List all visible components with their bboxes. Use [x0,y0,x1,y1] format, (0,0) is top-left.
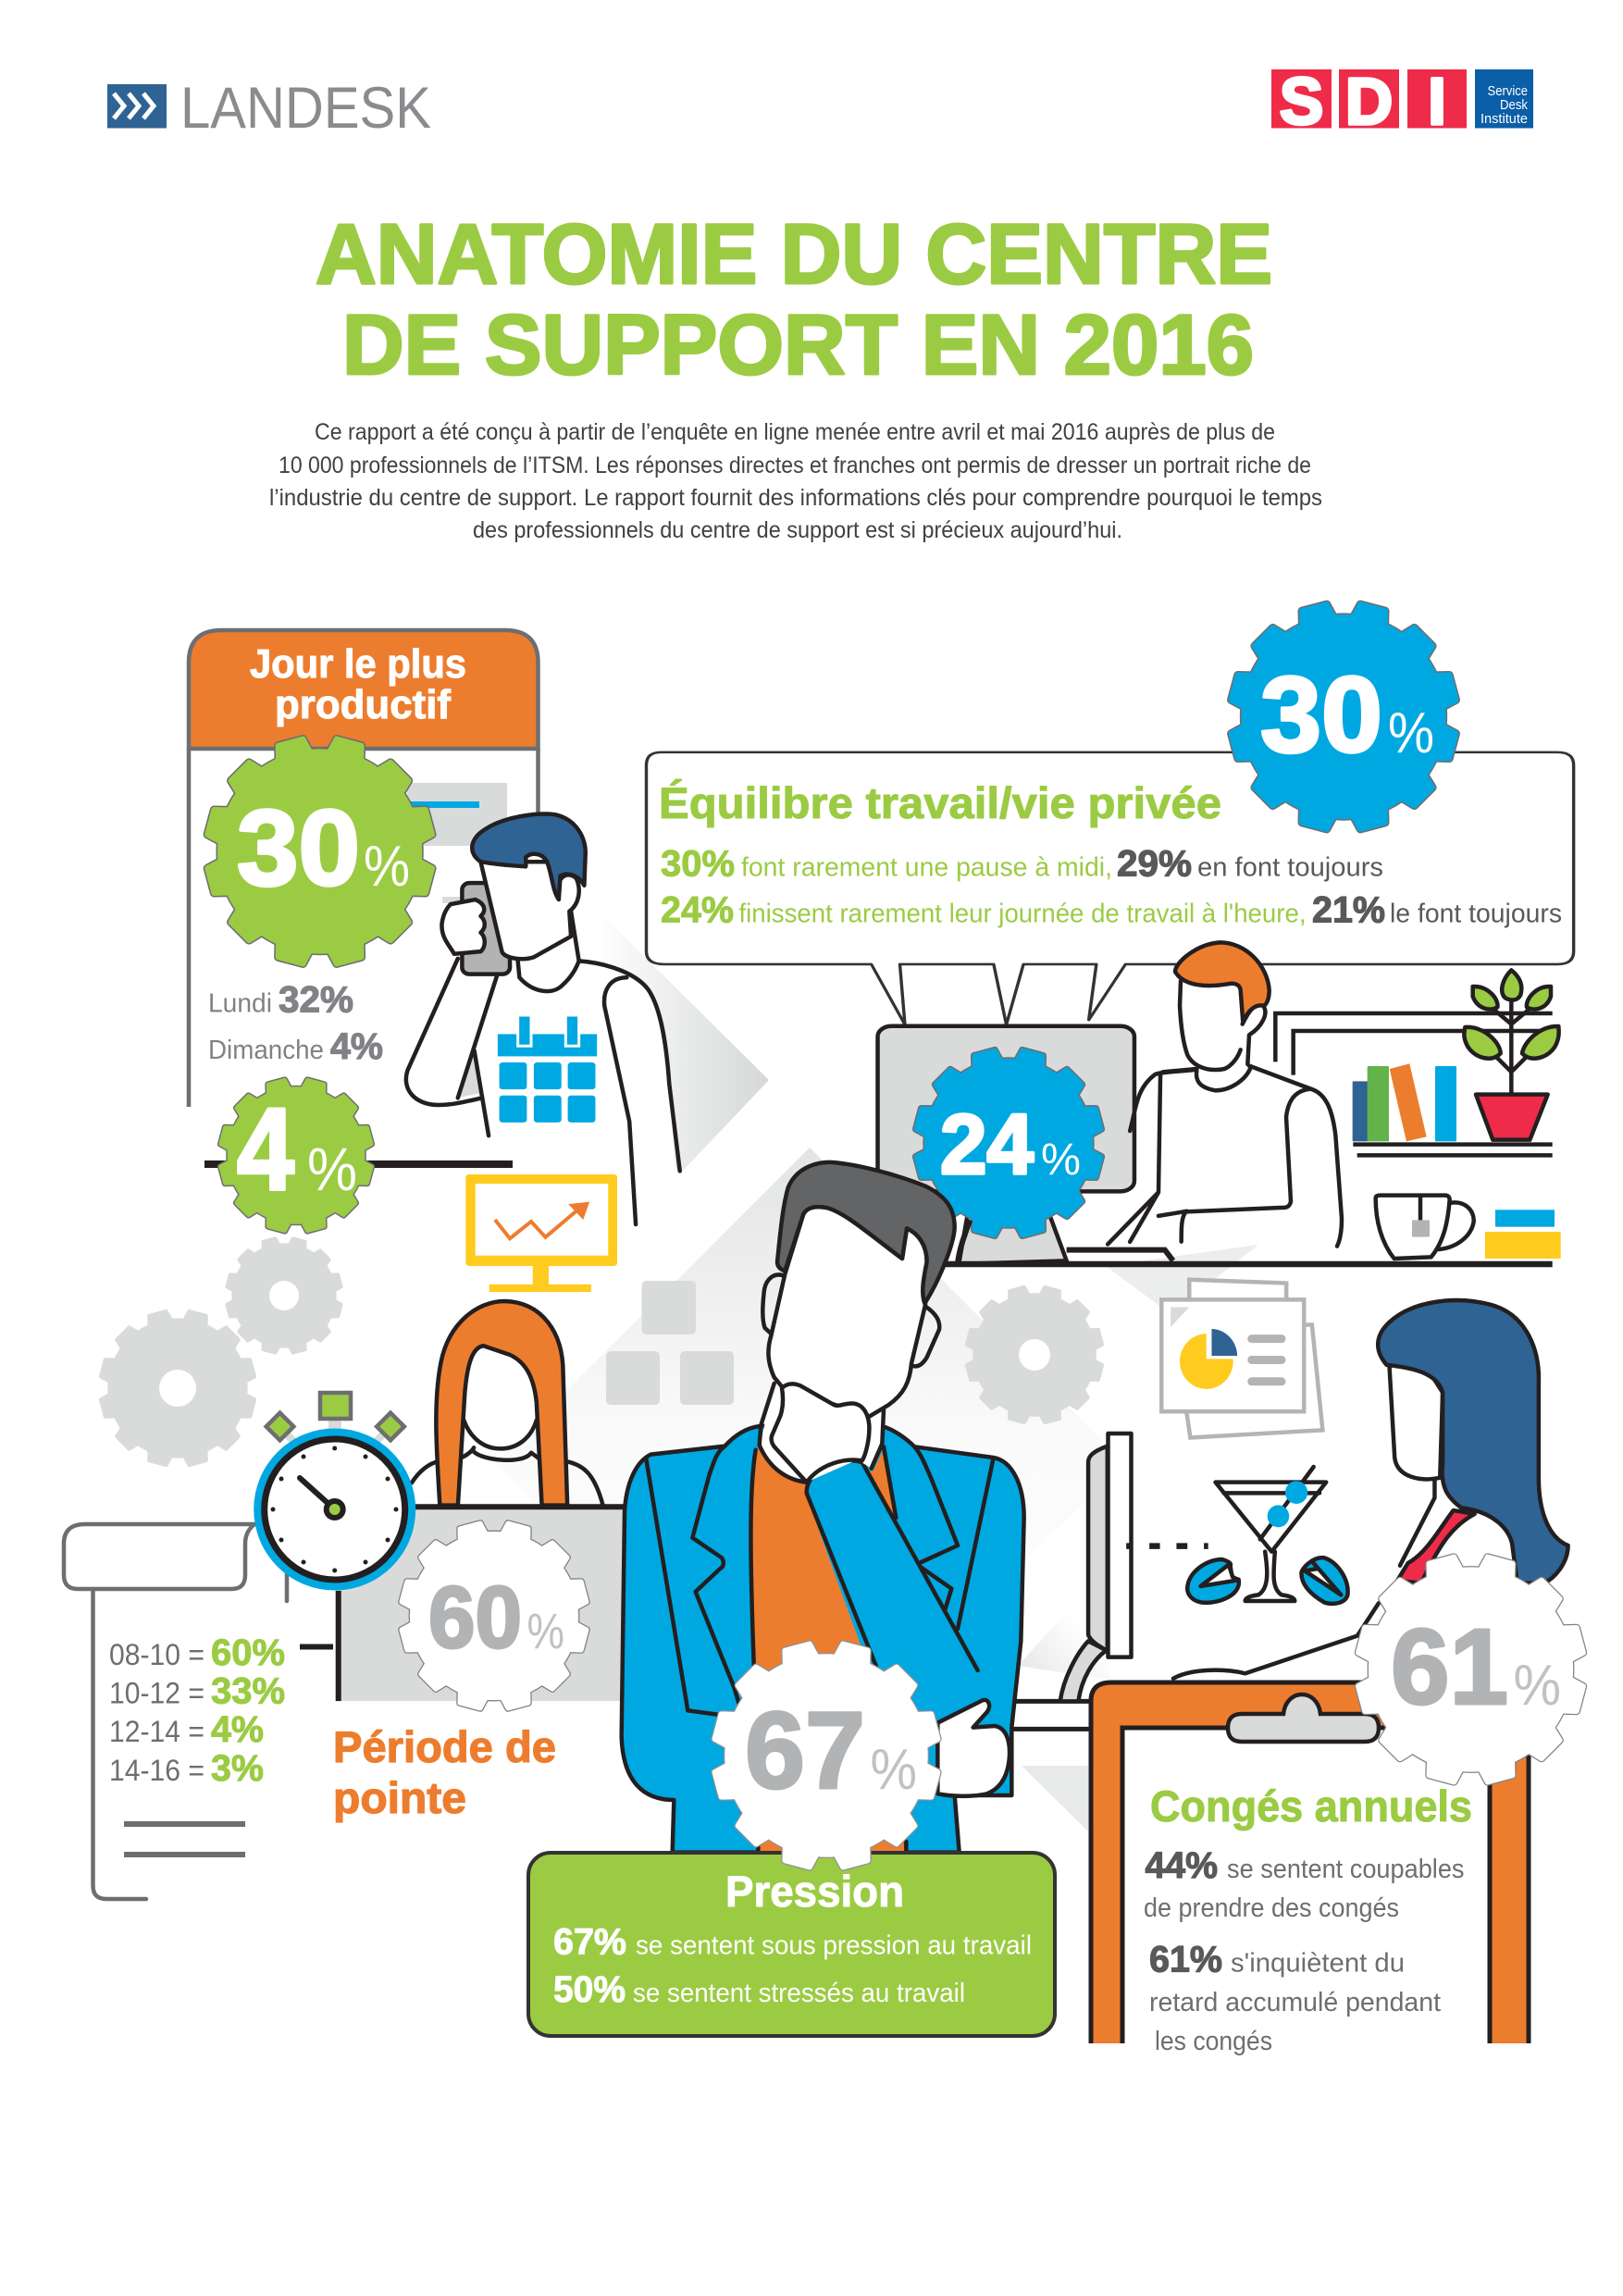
panel: pression [528,1853,1055,2036]
bubble text: équilibre: font rarement une pause à midi, [741,853,1112,883]
gear: 30% blue [1231,603,1456,830]
schedule text: 10-12 = [109,1677,204,1710]
shoulders [412,1447,603,1506]
gear: 30% green [206,738,433,964]
stat: lundi: 32% [279,979,353,1020]
intro paragraph [269,419,1322,543]
logo: SDI [1271,66,1533,139]
neck and arm [1173,1481,1434,1679]
logo: LANDESK: LANDESK [180,76,431,141]
bubble text: équilibre: en font toujours [1197,853,1383,883]
clipboard clip [1228,1694,1379,1742]
hair [1378,1300,1568,1583]
laptop [339,1507,636,1701]
gear: 60% white [401,1522,588,1709]
collar and neck [761,1382,884,1483]
clipboard text: congés annuels [1144,1781,1472,2056]
dress straps [1397,1510,1475,1583]
phone [462,883,510,974]
gear: 30% blue: % [1388,701,1434,765]
bubble text: équilibre: finissent rarement leur journée de travail à l'heure, [738,900,1307,929]
neck lines [760,1384,884,1483]
icon: martini and pistachios [1187,1467,1348,1604]
monitor arm [1060,1641,1107,1701]
hair [1175,942,1270,1023]
icon: calendar [498,1015,597,1123]
background diamond: left of profile monitor [1018,1573,1110,1680]
stat: dimanche [208,1026,383,1067]
books [1353,1063,1456,1141]
monitor [878,1026,1134,1191]
background wedge: beside clipboard [1022,1766,1088,1831]
title: ANATOMIE DU CENTRE [316,207,1272,302]
ear right [913,1307,939,1366]
keyboard [1067,1250,1173,1260]
bubble text: équilibre: 30% [661,844,735,885]
jacket [622,1426,1024,1853]
raised arm fill [807,1460,981,1703]
clipboard text: congés annuels: se sentent coupables [1227,1855,1464,1884]
schedule text: 33% [211,1671,285,1712]
figure: man on the phone [406,814,680,1235]
stat: lundi: Lundi [208,988,272,1018]
cup [1376,1196,1474,1259]
clipboard text: congés annuels: 44% [1146,1845,1218,1886]
clipboard text: congés annuels: de prendre des congés [1144,1893,1399,1923]
heading: période de pointe: Période de [333,1722,556,1771]
panel: pression: 67% [553,1921,626,1962]
intro paragraph: l’industrie du centre de support. Le rapport fournit des informations clés pour comprendre pourquoi le temps [269,485,1322,511]
face [1389,1365,1443,1479]
figure: woman with blue hair [1173,1300,1568,1679]
shelf [1275,1013,1553,1155]
gray gear: center right [966,1286,1103,1423]
gear: 4% green: 4 [237,1084,294,1214]
panel: jour le plus productif [189,630,539,1107]
hair [472,814,586,900]
chin hand [772,1384,869,1483]
panel: pression: se sentent stressés au travail [633,1979,965,2008]
shirt [751,1448,898,1703]
logo: SDI: S [1280,66,1323,139]
schedule text [109,1632,285,1789]
background wedge: below desk [1106,1245,1258,1314]
schedule text: 12-14 = [109,1715,204,1748]
gear: 24% blue [915,1049,1102,1236]
schedule text: 14-16 = [109,1754,204,1787]
table lines [994,1701,1092,1729]
logo: SDI: I [1428,66,1446,139]
schedule text: 4% [211,1709,264,1750]
bubble text: équilibre: le font toujours [1390,900,1562,929]
gray gear: small [226,1237,342,1354]
logo: SDI: Service [1488,83,1528,99]
left arm of desk worker [1108,1070,1196,1244]
bubble text: équilibre: Équilibre travail/vie privée [659,778,1221,827]
panel: jour le plus productif: productif [275,682,451,727]
gear: 67% white: % [870,1738,917,1802]
panel: pression: se sentent sous pression au travail [636,1930,1032,1960]
title: DE SUPPORT EN 2016 [342,298,1254,392]
speech bubble [646,752,1574,1024]
clipboard text: congés annuels: 61% [1149,1940,1222,1980]
dashed connector [1126,1543,1208,1549]
plant [1464,970,1559,1140]
intro paragraph: des professionnels du centre de support est si précieux aujourd’hui. [473,517,1122,543]
gear: 30% green: 30 [237,788,360,908]
logo: SDI: Institute [1481,111,1528,127]
logo: SDI: D [1345,66,1393,139]
gear: 30% blue: 30 [1260,654,1382,775]
clipboard text: congés annuels: retard accumulé pendant [1149,1988,1441,2017]
gray gear: large [100,1310,255,1466]
scene: woman with orange hair and laptop [339,1301,636,1701]
small dash [300,1644,333,1649]
logo: SDI: Desk [1500,97,1528,113]
head [480,862,579,959]
bubble text: équilibre: 24% [661,890,734,931]
monitor foot behind [958,1220,970,1263]
desk [944,1261,1553,1267]
hair [436,1301,567,1506]
gear: 61% white: % [1514,1654,1561,1718]
figure: central thinking man [622,1162,1024,1853]
intro paragraph: Ce rapport a été conçu à partir de l’enquête en ligne menée entre avril et mai 2016 auprès de plus de [315,419,1275,445]
gear: 4% green [220,1079,372,1232]
panel frame [189,749,539,1107]
clipboard text: congés annuels: les congés [1155,2027,1272,2056]
clipboard [1091,1682,1529,2043]
panel header [189,630,539,749]
clipboard text: congés annuels: Congés annuels [1150,1781,1472,1831]
scene: profile monitor and table [994,1433,1208,1729]
title [316,207,1272,392]
panel: pression: Pression [725,1867,904,1916]
gear: 67% white: 67 [745,1690,865,1812]
icon: documents with pie chart [1161,1280,1322,1437]
desk line left [204,1160,513,1168]
stacked items [1495,1210,1555,1227]
panel heading: Jour le plus [250,641,466,687]
intro paragraph: 10 000 professionnels de l’ITSM. Les réponses directes et franches ont permis de dresser un portrait riche de [279,453,1311,478]
mini screen behind gear [407,783,507,903]
gear: 4% green: % [307,1135,357,1203]
clipboard text: congés annuels: s'inquiètent du [1231,1949,1405,1979]
bubble text: équilibre: 29% [1117,844,1192,885]
heading: période de pointe [333,1722,556,1822]
bubble text: équilibre: 21% [1312,890,1385,931]
stat: dimanche: Dimanche [208,1036,324,1065]
document scroll [64,1524,287,1899]
schedule text: 3% [211,1748,264,1789]
stat: dimanche: 4% [330,1026,383,1067]
gear: 61% white [1357,1557,1584,1782]
gear: 24% blue: % [1041,1136,1081,1185]
gray squares [606,1281,734,1405]
background diamond: behind central figure [495,1148,1124,1777]
monitor stand [959,1192,1067,1264]
gear: 60% white: 60 [428,1569,522,1667]
gear: 30% green: % [364,835,410,899]
panel: pression: 50% [553,1969,626,2010]
gear: 60% white: % [527,1604,564,1659]
jacket lines [646,1446,993,1853]
chin [464,1420,537,1448]
body [1163,1066,1342,1247]
ear left [762,1274,784,1334]
shirt lower part [758,1826,906,1853]
gear: 67% white [714,1644,938,1868]
hand [441,900,485,954]
background diamond: behind phone man [537,898,769,1171]
body [406,912,680,1235]
stat: lundi [208,979,353,1020]
lower hand [937,1700,1010,1796]
raised arm outline [807,1460,978,1670]
bubble text: équilibre [659,778,1562,931]
schedule text: 08-10 = [109,1638,204,1671]
face [768,1207,927,1417]
hair [777,1162,955,1303]
stopwatch [254,1393,415,1590]
scene: desk monitor [878,1026,1196,1264]
head [1180,981,1265,1070]
heading: période de pointe: pointe [333,1773,466,1822]
gear: 61% white: 61 [1391,1607,1508,1727]
schedule text: 60% [211,1632,285,1673]
gear: 24% blue: 24 [940,1098,1034,1192]
scene: desk worker and shelf [944,942,1561,1264]
icon: yellow chart monitor [465,1174,617,1292]
monitor back [1088,1446,1108,1651]
monitor screen [1108,1433,1131,1657]
